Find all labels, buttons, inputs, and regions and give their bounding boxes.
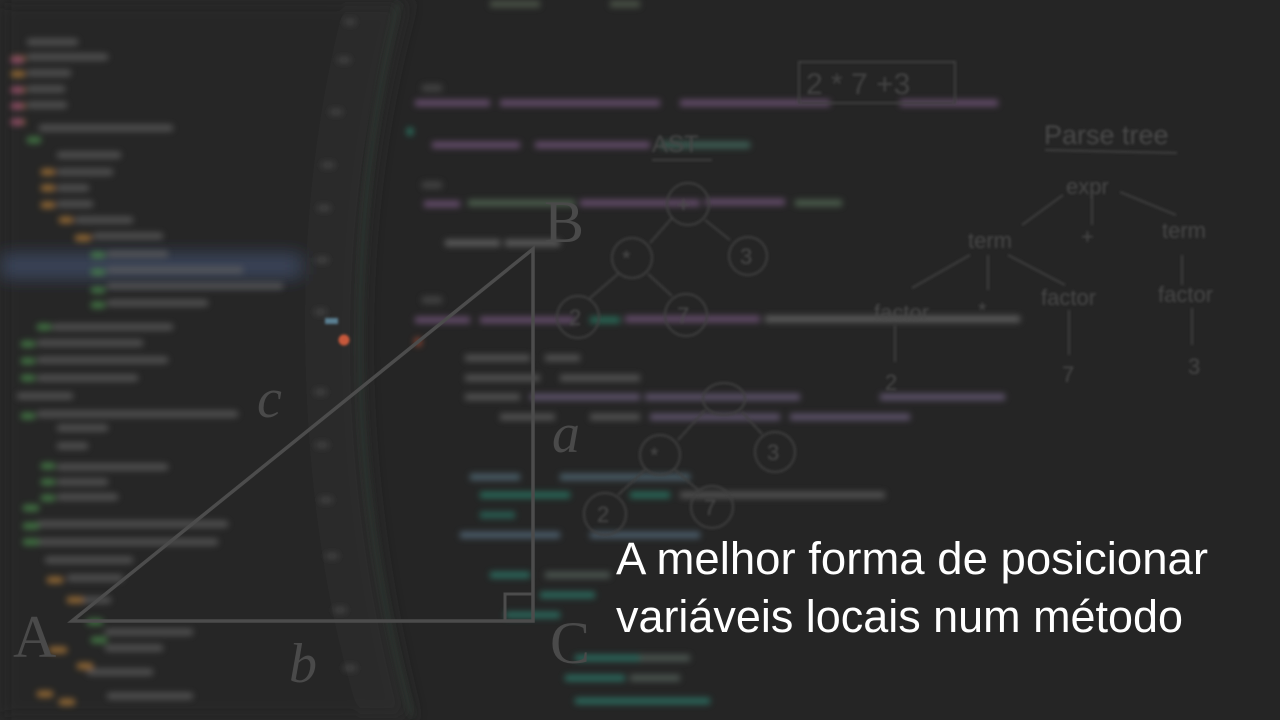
right angle marker <box>505 594 533 621</box>
overall sketch strokes: 3 <box>767 440 779 465</box>
title: variáveis locais num método <box>616 591 1183 642</box>
overall sketch strokes: 7 <box>1062 362 1074 387</box>
overall sketch strokes: Parse tree <box>1044 120 1169 150</box>
code lines <box>410 4 1020 701</box>
overall sketch strokes: * <box>978 298 987 323</box>
overall sketch strokes: 3 <box>740 244 752 269</box>
vertex and side labels: A <box>13 604 56 670</box>
overall sketch strokes: 2 <box>569 305 581 330</box>
overall sketch strokes: term <box>1162 218 1206 243</box>
overall sketch strokes: * <box>622 246 631 271</box>
overall sketch strokes: term <box>968 228 1012 253</box>
file tree rows <box>14 42 280 702</box>
overall sketch strokes: 2 * 7 +3 <box>806 68 910 101</box>
markers <box>325 318 350 346</box>
overall sketch strokes: expr <box>1066 174 1109 199</box>
vertex and side labels: b <box>289 633 317 695</box>
overall sketch strokes: factor <box>874 300 929 325</box>
title <box>616 533 1208 642</box>
vertex and side labels: C <box>550 610 590 676</box>
overall sketch strokes: + <box>677 192 690 217</box>
overall sketch strokes: AST <box>652 131 699 158</box>
file tree panel <box>0 0 412 720</box>
triangle <box>72 249 533 621</box>
triangle diagram <box>13 189 590 695</box>
overall sketch strokes: 3 <box>1188 354 1200 379</box>
vertex and side labels: B <box>544 189 584 255</box>
overall sketch strokes: + <box>1081 224 1094 249</box>
overall sketch strokes: 7 <box>704 495 716 520</box>
overall sketch strokes: factor <box>1158 282 1213 307</box>
editor gutter line <box>360 3 412 716</box>
vertex and side labels <box>13 189 590 695</box>
overall sketch strokes <box>557 62 1213 535</box>
title: A melhor forma de posicionar <box>616 533 1208 584</box>
overall sketch strokes: 2 <box>597 502 609 527</box>
overall sketch strokes: factor <box>1041 285 1096 310</box>
overall sketch strokes: 7 <box>677 303 689 328</box>
overall sketch strokes: * <box>650 443 659 468</box>
vertex and side labels: a <box>552 403 580 465</box>
line numbers <box>315 22 356 668</box>
vertex and side labels: c <box>257 368 282 430</box>
overall sketch strokes: 2 <box>885 370 897 395</box>
